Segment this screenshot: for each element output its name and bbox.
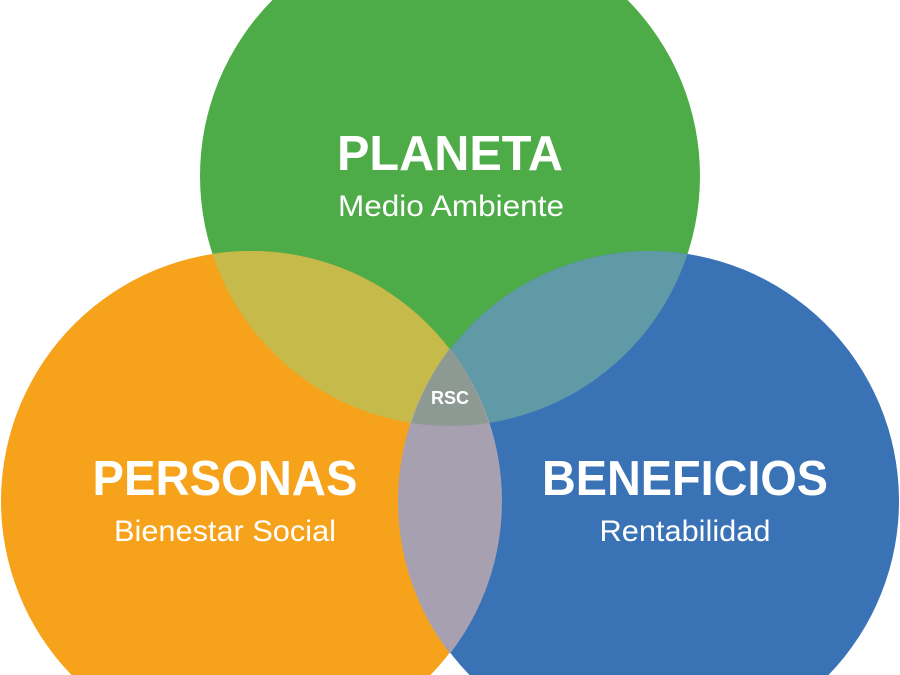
circle: beneficios (399, 251, 899, 675)
overlap: planeta and beneficios (411, 251, 688, 426)
label: personas: PERSONAS (92, 452, 358, 506)
label: planeta: PLANETA (337, 127, 563, 181)
label: personas (92, 452, 358, 548)
label: planeta: Medio Ambiente (338, 190, 564, 223)
label: RSC: RSC (431, 388, 469, 408)
overlap: center of all three (411, 348, 489, 426)
circle: planeta (200, 0, 700, 426)
label: beneficios (542, 452, 828, 548)
label: beneficios: BENEFICIOS (542, 452, 828, 506)
label: beneficios: Rentabilidad (600, 515, 770, 548)
label: personas: Bienestar Social (114, 515, 336, 548)
label: planeta (337, 127, 564, 223)
circle: personas (1, 251, 501, 675)
overlap: personas and beneficios (398, 348, 502, 654)
overlap: planeta and personas (212, 251, 489, 426)
